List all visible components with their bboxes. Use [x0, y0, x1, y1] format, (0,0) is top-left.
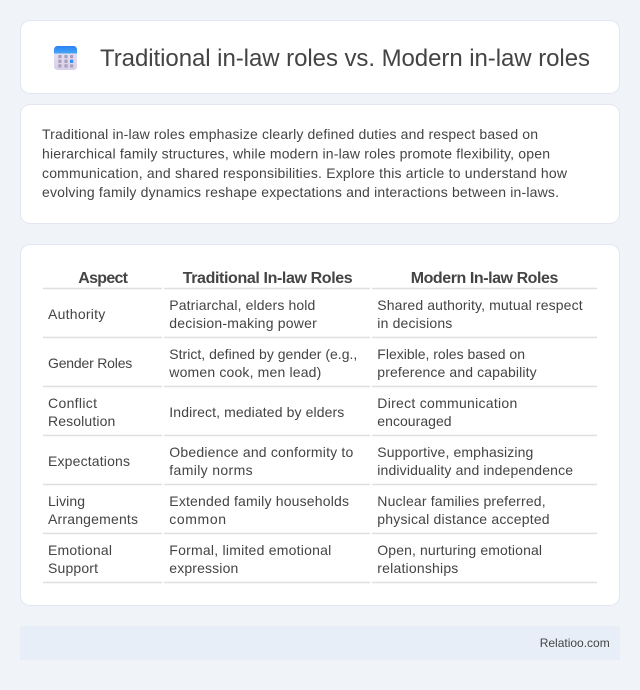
row: authority [48, 297, 583, 331]
row: living arrangements: Living [48, 493, 85, 509]
row: authority: Shared authority, mutual respect [377, 297, 583, 313]
row: conflict resolution: encouraged [377, 413, 452, 429]
table rules [43, 288, 597, 583]
row: expectations: Expectations [48, 453, 130, 469]
row: emotional support: Emotional [48, 542, 112, 558]
table header row [78, 270, 558, 287]
row: conflict resolution: Resolution [48, 413, 115, 429]
row: conflict resolution: Indirect, mediated by elders [169, 404, 344, 420]
intro text: communication, and shared responsibilities. Explore this article to understand how [42, 165, 568, 181]
intro panel [20, 104, 620, 224]
header: aspect: Aspect [78, 270, 129, 287]
header: modern: Modern In-law Roles [411, 270, 558, 287]
row: emotional support: Support [48, 560, 98, 576]
row: expectations: Supportive, emphasizing [377, 444, 533, 460]
row: authority: decision-making power [169, 315, 317, 331]
row: gender roles: preference and capability [377, 364, 537, 380]
row: emotional support: relationships [377, 560, 458, 576]
intro text [42, 126, 568, 200]
row: gender roles: women cook, men lead) [168, 364, 321, 380]
row: gender roles [48, 346, 537, 380]
row: living arrangements: Arrangements [48, 511, 138, 527]
intro text: evolving family dynamics reshape expectations and interactions between in-laws. [42, 184, 559, 200]
row: emotional support: Open, nurturing emotional [377, 542, 542, 558]
row: authority: in decisions [377, 315, 452, 331]
row: gender roles: Flexible, roles based on [377, 346, 525, 362]
table panel [20, 244, 620, 606]
row: living arrangements: common [169, 511, 226, 527]
row: expectations: individuality and independence [377, 462, 573, 478]
header panel [20, 20, 620, 94]
footer credit: Relatioo.com [540, 636, 610, 650]
row: living arrangements: Nuclear families preferred, [377, 493, 546, 509]
intro text: Traditional in-law roles emphasize clearly defined duties and respect based on [42, 126, 538, 142]
icon: calendar [54, 46, 77, 70]
row: emotional support [48, 542, 542, 576]
footer bar [20, 626, 620, 660]
row: conflict resolution [48, 395, 517, 429]
row: expectations: family norms [169, 462, 253, 478]
row: living arrangements [48, 493, 550, 527]
row: gender roles: Strict, defined by gender (e.g., [169, 346, 357, 362]
row: expectations [48, 444, 573, 478]
row: emotional support: Formal, limited emotional [169, 542, 331, 558]
row: conflict resolution: Conflict [48, 395, 97, 411]
row: expectations: Obedience and conformity to [169, 444, 354, 460]
row: emotional support: expression [169, 560, 238, 576]
row: authority: Authority [48, 306, 105, 322]
row: conflict resolution: Direct communication [377, 395, 517, 411]
row: living arrangements: Extended family households [169, 493, 349, 509]
row: gender roles: Gender Roles [48, 355, 132, 371]
intro text: hierarchical family structures, while modern in-law roles promote flexibility, open [42, 145, 550, 161]
title: Traditional in-law roles vs. Modern in-law roles [100, 45, 590, 72]
header: traditional: Traditional In-law Roles [183, 270, 353, 287]
row: authority: Patriarchal, elders hold [169, 297, 315, 313]
row: living arrangements: physical distance accepted [377, 511, 550, 527]
